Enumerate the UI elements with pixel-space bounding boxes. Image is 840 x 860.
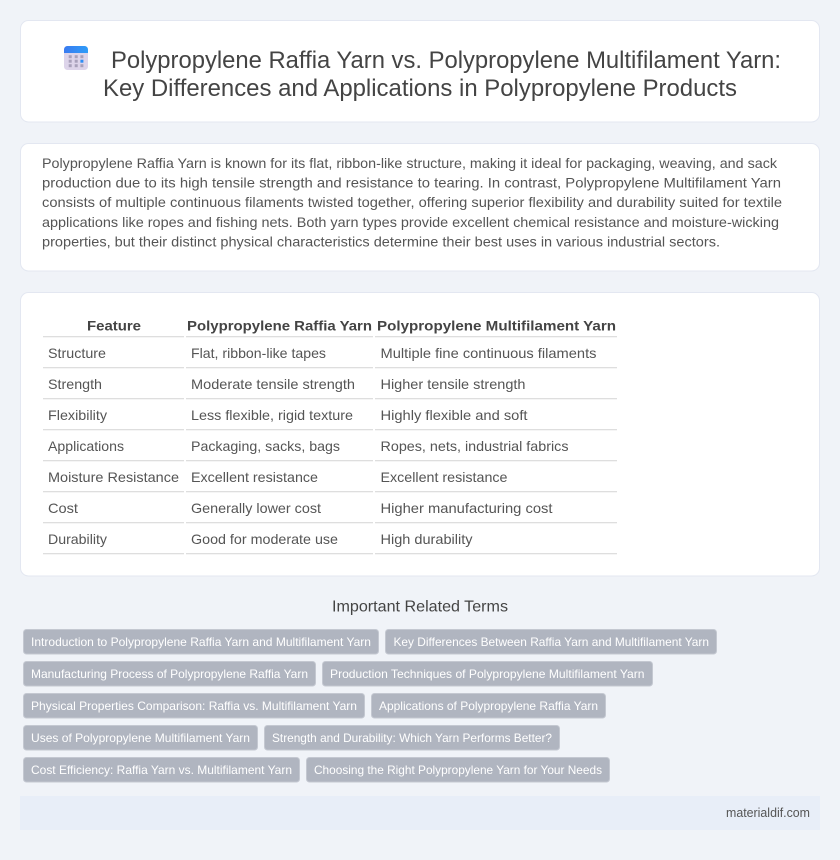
- row: cost: Generally lower cost: [191, 500, 321, 516]
- footer: [20, 796, 820, 830]
- row: strength: Moderate tensile strength: [191, 376, 355, 392]
- panel: introduction text: consists of multiple continuous filaments twisted together, offering superior flexibility and durability suited for textile: [42, 194, 782, 210]
- row: durability: High durability: [380, 531, 472, 547]
- heading: important related terms: Important Related Terms: [332, 598, 508, 616]
- panel: introduction text: applications like ropes and fishing nets. Both yarn types provide excellent chemical resistance and moisture-wicking: [42, 214, 779, 230]
- row: moisture resistance: Moisture Resistance: [48, 469, 179, 485]
- chip: [372, 694, 606, 718]
- panel: introduction text: production due to its high tensile strength and resistance to tearing. In contrast, Polypropylene Multifilament Yarn: [42, 175, 781, 191]
- row: flexibility: Less flexible, rigid texture: [191, 407, 353, 423]
- row: durability: [48, 531, 472, 547]
- row: flexibility: Flexibility: [48, 407, 107, 423]
- chip: [24, 662, 316, 686]
- row: durability: Durability: [48, 531, 107, 547]
- title: Polypropylene Raffia Yarn vs. Polypropylene Multifilament Yarn:: [111, 47, 781, 74]
- chip: Physical Properties Comparison: Raffia vs. Multifilament Yarn: [31, 699, 357, 713]
- row: moisture resistance: Excellent resistance: [191, 469, 318, 485]
- chip: [24, 758, 300, 782]
- chip: Cost Efficiency: Raffia Yarn vs. Multifilament Yarn: [31, 763, 292, 777]
- row: strength: Higher tensile strength: [380, 376, 526, 392]
- row: applications: Ropes, nets, industrial fabrics: [380, 438, 568, 454]
- icon: calendar: [64, 46, 88, 70]
- title: Key Differences and Applications in Polypropylene Products: [103, 75, 737, 102]
- row: applications: [48, 438, 568, 454]
- title: [103, 47, 781, 102]
- chip: Applications of Polypropylene Raffia Yarn: [379, 699, 598, 713]
- row: moisture resistance: [48, 469, 508, 485]
- chip: Strength and Durability: Which Yarn Performs Better?: [272, 731, 552, 745]
- chip: [386, 630, 716, 654]
- row: moisture resistance: Excellent resistance: [380, 469, 508, 485]
- footer: materialdif.com: [726, 806, 810, 820]
- chip: Production Techniques of Polypropylene Multifilament Yarn: [330, 667, 644, 681]
- chip: Uses of Polypropylene Multifilament Yarn: [31, 731, 250, 745]
- table header row: Polypropylene Raffia Yarn: [187, 318, 372, 334]
- table header row: [87, 318, 616, 334]
- row: strength: Strength: [48, 376, 102, 392]
- chip: [24, 630, 378, 654]
- panel: introduction text: properties, but their distinct physical characteristics determine their best uses in various industrial sectors.: [42, 233, 720, 249]
- chip: Manufacturing Process of Polypropylene Raffia Yarn: [31, 667, 308, 681]
- row: structure: Structure: [48, 345, 106, 361]
- row: structure: [48, 345, 596, 361]
- row: applications: Applications: [48, 438, 124, 454]
- panel: introduction text: [20, 144, 820, 271]
- chip: [322, 662, 652, 686]
- row: durability: Good for moderate use: [191, 531, 338, 547]
- row: structure: Flat, ribbon-like tapes: [191, 345, 326, 361]
- related term chips: [24, 630, 716, 782]
- row: applications: Packaging, sacks, bags: [191, 438, 340, 454]
- table header row: Polypropylene Multifilament Yarn: [377, 318, 616, 334]
- row: strength: [48, 376, 526, 392]
- row: cost: Higher manufacturing cost: [380, 500, 553, 516]
- row: flexibility: Highly flexible and soft: [380, 407, 528, 423]
- chip: [24, 694, 364, 718]
- row: flexibility: [48, 407, 528, 423]
- row: structure: Multiple fine continuous filaments: [380, 345, 596, 361]
- chip: Choosing the Right Polypropylene Yarn for Your Needs: [314, 763, 602, 777]
- chip: Introduction to Polypropylene Raffia Yarn and Multifilament Yarn: [31, 635, 371, 649]
- chip: [24, 726, 258, 750]
- chip: [264, 726, 560, 750]
- row: cost: Cost: [48, 500, 78, 516]
- panel: comparison table: [20, 292, 820, 576]
- panel: header: [20, 20, 820, 122]
- chip: Key Differences Between Raffia Yarn and Multifilament Yarn: [394, 635, 709, 649]
- table header row: Feature: [87, 318, 141, 334]
- chip: [306, 758, 610, 782]
- row: cost: [48, 500, 553, 516]
- panel: introduction text: Polypropylene Raffia Yarn is known for its flat, ribbon-like structure, making it ideal for packaging, weaving, and sack: [42, 155, 778, 171]
